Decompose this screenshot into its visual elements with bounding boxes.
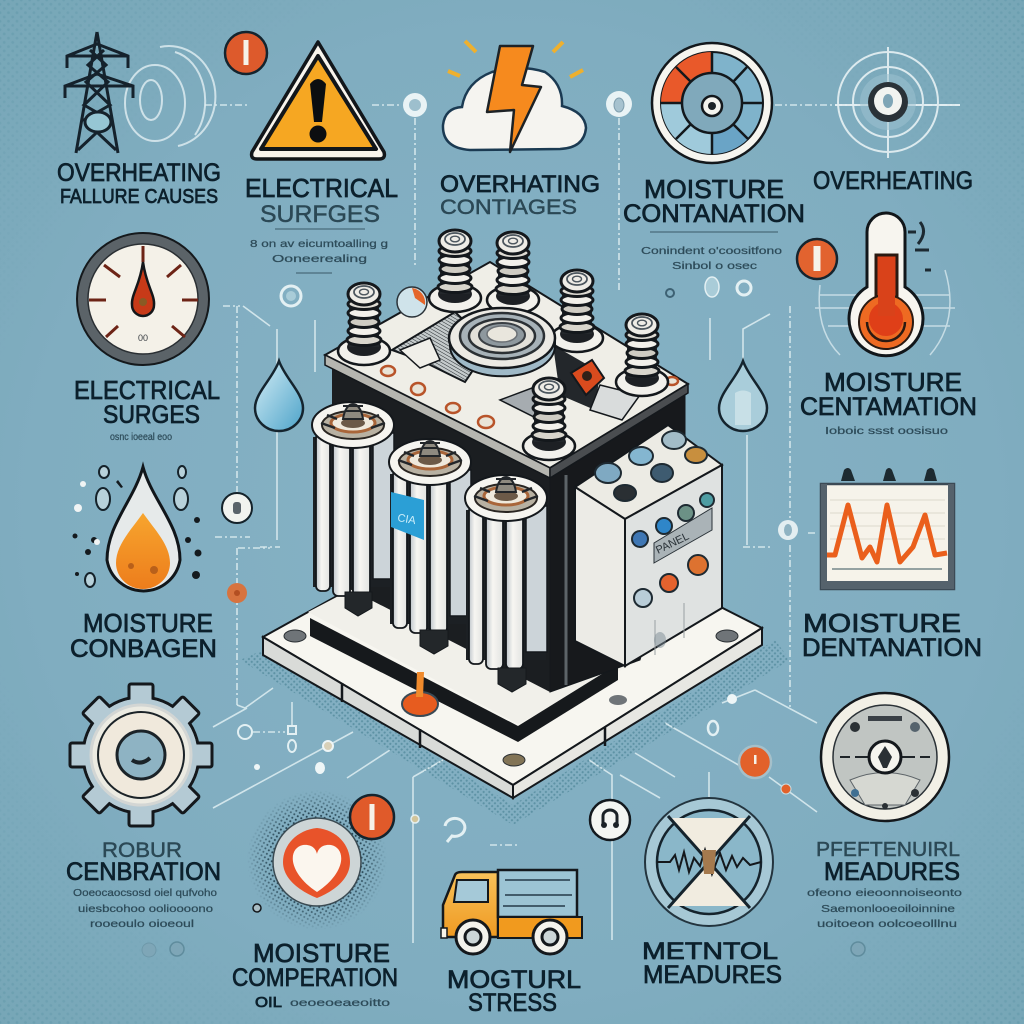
label: overheating top right: OVERHEATING [813,167,973,195]
label: mogturl stress [447,966,581,1017]
label: moisture contanation: Sinbol o osec [672,261,757,272]
label: metntol meadures: MEADURES [643,961,782,989]
badge: number 1 right [797,239,837,279]
label: preventive measures: ofeono eieoonnoiseonto [807,888,963,899]
label: moisture contanation [623,174,805,272]
label: electrical surges: 8 on av eicumtoalling g [250,239,388,250]
icon: thermometer [815,213,955,356]
icon: gear [70,684,212,826]
node: left connector [222,493,252,523]
label: overheating failure causes: FALLURE CAUSES [60,186,218,208]
control cabinet: PANEL [654,530,691,557]
label: preventive measures: MEADURES [824,858,960,886]
icon: water drop left [255,361,303,431]
tank lid [325,262,688,478]
icon: oil drop with droplets [72,466,202,591]
label: moisture centamation: CENTAMATION [800,393,977,421]
node: bottom music marker [590,800,630,840]
label: electrical surges left: ELECTRICAL [74,375,220,405]
label: robur cenbration: ROBUR [102,839,182,862]
label: overheating failure causes [57,159,221,208]
feet [345,592,526,692]
label: moisture comperation oil: COMPERATION [232,964,398,992]
icon: warning marker [739,746,791,794]
control cabinet [575,425,722,666]
icon: pressure gauge: 00 [138,333,148,343]
label: moisture contanation: MOISTURE [644,174,784,204]
label: preventive measures: Saemonlooeoiloinnine [821,904,956,915]
connector lines [142,105,960,957]
label: moisture centamation: Ioboic ssst oosisuo [825,426,949,437]
icon: warning triangle [252,42,384,159]
label: robur cenbration [66,839,221,930]
central disc [449,308,555,376]
icon: trend chart [821,468,954,589]
base shadow [240,640,790,825]
node: top connector left [403,93,427,117]
icon: delivery truck [441,870,582,954]
label: moisture contanation: CONTANATION [623,200,805,228]
label: robur cenbration: CENBRATION [66,858,221,886]
icon: preventive dial [821,693,949,821]
label: metntol meadures [642,938,782,989]
label: moisture centamation [800,367,977,437]
plinth [308,590,640,742]
icon: pressure gauge [77,233,209,365]
label: robur cenbration: rooeoulo oioeoul [90,919,194,930]
label: electrical surges left [74,375,220,443]
label: moisture conbagen: MOISTURE [83,608,213,638]
label: overheating failure causes: OVERHEATING [57,159,221,187]
icon: storm cloud with lightning [443,41,586,152]
label: moisture comperation oil [232,938,398,1011]
label: robur cenbration: Ooeocaocsosd oiel qufvoho [73,888,218,899]
label: robur cenbration: uiesbcohoo oolioooono [78,904,214,915]
icon: transmission tower [65,32,215,153]
label: mogturl stress: STRESS [468,989,557,1017]
label: mogturl stress: MOGTURL [447,966,581,994]
front bushings [523,314,668,460]
label: preventive measures [807,839,963,930]
radiators [312,402,547,669]
radiators: CIA [396,512,417,527]
lid parts [397,287,640,420]
label: moisture contanation: Conindent o'coositfono [641,246,783,257]
label: electrical surges: Ooneerealing [272,254,367,265]
label: electrical surges: ELECTRICAL [245,173,398,203]
label: preventive measures: uoitoeon oolcoeolllnu [817,919,957,930]
label: moisture conbagen [70,608,217,663]
label: electrical surges left: osnc ioeeal eoo [110,432,172,443]
label: moisture dentanation: MOISTURE [803,608,961,638]
icon: transformer illustration [240,230,790,825]
label: moisture comperation oil: OIL [255,994,282,1011]
node: right connector [778,520,798,540]
icon: target rings [835,47,960,158]
icon: hourglass waveform dial [645,798,773,926]
label: moisture conbagen: CONBAGEN [70,635,217,663]
tank body [332,362,550,692]
label: overhating contiages [440,171,600,219]
label: moisture dentanation [802,608,982,662]
base plate [263,500,762,798]
label: metntol meadures: METNTOL [642,938,778,965]
orange valve [402,672,438,716]
badge: number 1 [225,32,267,74]
bushings [338,230,603,365]
label: moisture centamation: MOISTURE [824,367,962,397]
label: preventive measures: PFEFTENUIRL [816,839,960,861]
label: overhating contiages: OVERHATING [440,171,600,198]
label: moisture comperation oil: oeoeoeaeoitto [290,998,391,1009]
node: left orange marker [227,583,247,603]
node: top connector right [606,91,632,117]
icon: water drop right [719,361,767,431]
label: electrical surges [245,173,398,273]
label: overhating contiages: CONTIAGES [440,196,577,219]
icon: heart warning [247,790,394,930]
back wires [392,312,600,410]
label: moisture dentanation: DENTANATION [802,634,982,662]
label: moisture comperation oil: MOISTURE [253,938,390,968]
label: electrical surges left: SURGES [103,401,200,429]
icon: segmented dial [652,43,772,163]
label: electrical surges: SURFGES [260,201,380,228]
